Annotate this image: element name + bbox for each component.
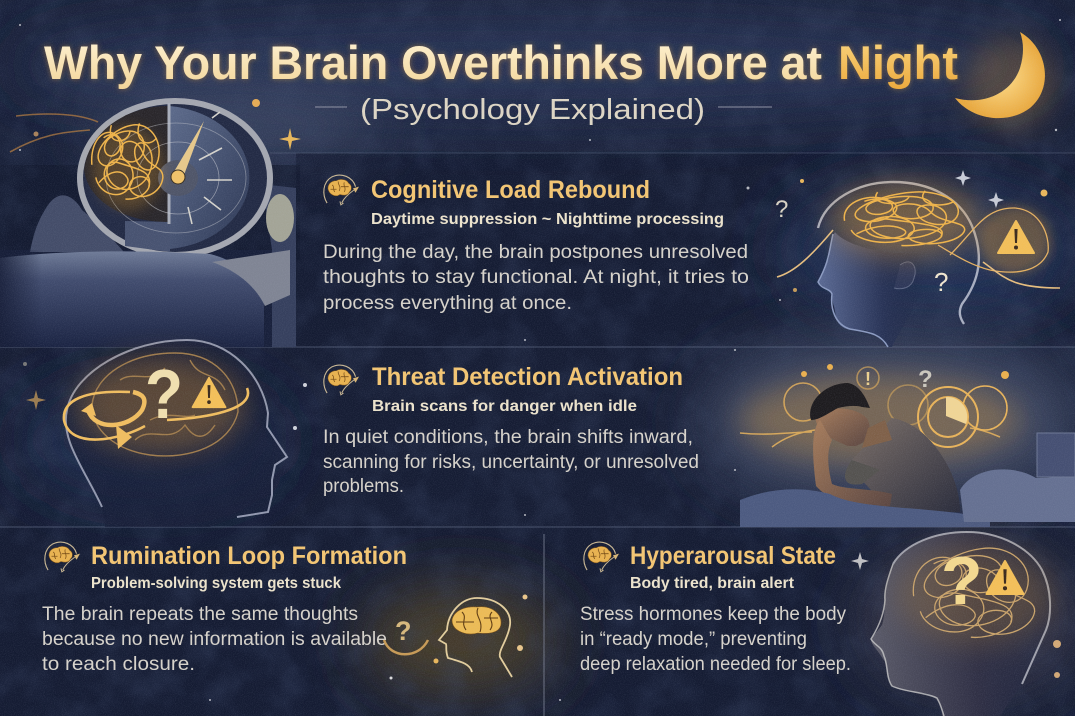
icon: brain bbox=[324, 365, 359, 395]
illustration: overloaded head with warning bbox=[775, 170, 1060, 347]
icon: warning triangle bbox=[938, 206, 1051, 274]
icon: headboard and stand bbox=[262, 184, 296, 347]
body text: because no new information is available bbox=[42, 629, 387, 650]
icon: clock bbox=[77, 98, 273, 258]
heading: Threat Detection Activation bbox=[372, 363, 683, 391]
heading: Hyperarousal State bbox=[630, 542, 836, 570]
illustration: profile head with scribbled thoughts bbox=[851, 532, 1061, 716]
icon: brain bbox=[45, 542, 80, 572]
illustration: man awake in bed with swirling worries bbox=[740, 364, 1075, 527]
body text: deep relaxation needed for sleep. bbox=[580, 654, 851, 675]
title: Why Your Brain Overthinks More at bbox=[44, 36, 822, 89]
heading: Cognitive Load Rebound bbox=[371, 176, 650, 204]
icon: brain bbox=[584, 542, 619, 572]
body text: to reach closure. bbox=[42, 654, 195, 675]
subtitle: (Psychology Explained) bbox=[360, 94, 705, 126]
icon: bedding bbox=[740, 489, 990, 527]
arrow: thought loop bbox=[64, 388, 248, 440]
icon: man silhouette bbox=[810, 383, 960, 512]
section dividers bbox=[0, 153, 1075, 716]
panel: threat detection text bbox=[323, 363, 699, 497]
subheading: Brain scans for danger when idle bbox=[372, 398, 637, 415]
body text: The brain repeats the same thoughts bbox=[42, 604, 358, 625]
icon: brain bbox=[324, 175, 359, 205]
icon: spark streaks bbox=[10, 114, 98, 152]
body text bbox=[580, 604, 851, 675]
icon: question mark: ? bbox=[918, 366, 933, 393]
body text: thoughts to stay functional. At night, it tries to bbox=[323, 267, 749, 288]
body text bbox=[323, 242, 749, 314]
body text: During the day, the brain postpones unresolved bbox=[323, 242, 748, 263]
icon: blanket bbox=[0, 251, 264, 347]
body text bbox=[42, 604, 387, 675]
illustration: small head with brain and looping question bbox=[384, 594, 528, 680]
icon: tangled thoughts bbox=[92, 126, 164, 210]
illustration: small head with brain and looping question: ? bbox=[395, 616, 412, 646]
icon: face profile bbox=[818, 232, 926, 347]
heading: Rumination Loop Formation bbox=[91, 542, 407, 570]
subheading: Problem-solving system gets stuck bbox=[91, 575, 341, 592]
panel: cognitive load rebound illustration — clock and bed bbox=[0, 98, 301, 347]
icon: warning triangle bbox=[192, 378, 226, 407]
body text bbox=[323, 427, 699, 497]
subheading: Body tired, brain alert bbox=[630, 575, 794, 592]
body text: Stress hormones keep the body bbox=[580, 604, 846, 625]
body text: In quiet conditions, the brain shifts inward, bbox=[323, 427, 693, 448]
icon: lightning streaks bbox=[777, 230, 1060, 288]
icon: warning triangle bbox=[986, 561, 1024, 594]
icon: question mark: ? bbox=[941, 543, 983, 619]
body text: scanning for risks, uncertainty, or unresolved bbox=[323, 452, 699, 473]
icon: question mark: ? bbox=[145, 355, 183, 433]
body text: in “ready mode,” preventing bbox=[580, 629, 807, 650]
body text: problems. bbox=[323, 476, 404, 497]
panel: hyperarousal text bbox=[580, 542, 851, 675]
icon: question marks: ? bbox=[775, 196, 788, 223]
title: Night bbox=[838, 36, 958, 89]
icon: crescent moon bbox=[955, 32, 1056, 131]
panel: cognitive load rebound text bbox=[323, 175, 749, 314]
illustration: head with loop, question mark and warning bbox=[23, 340, 307, 527]
icon: pillow bbox=[30, 195, 124, 252]
illustration: man awake in bed with swirling worries: ! bbox=[865, 369, 871, 389]
illustration: overloaded head with warning: ? bbox=[934, 267, 948, 297]
subheading: Daytime suppression ~ Nighttime processing bbox=[371, 211, 724, 228]
body text: process everything at once. bbox=[323, 293, 572, 314]
panel: rumination loop text bbox=[42, 542, 407, 675]
